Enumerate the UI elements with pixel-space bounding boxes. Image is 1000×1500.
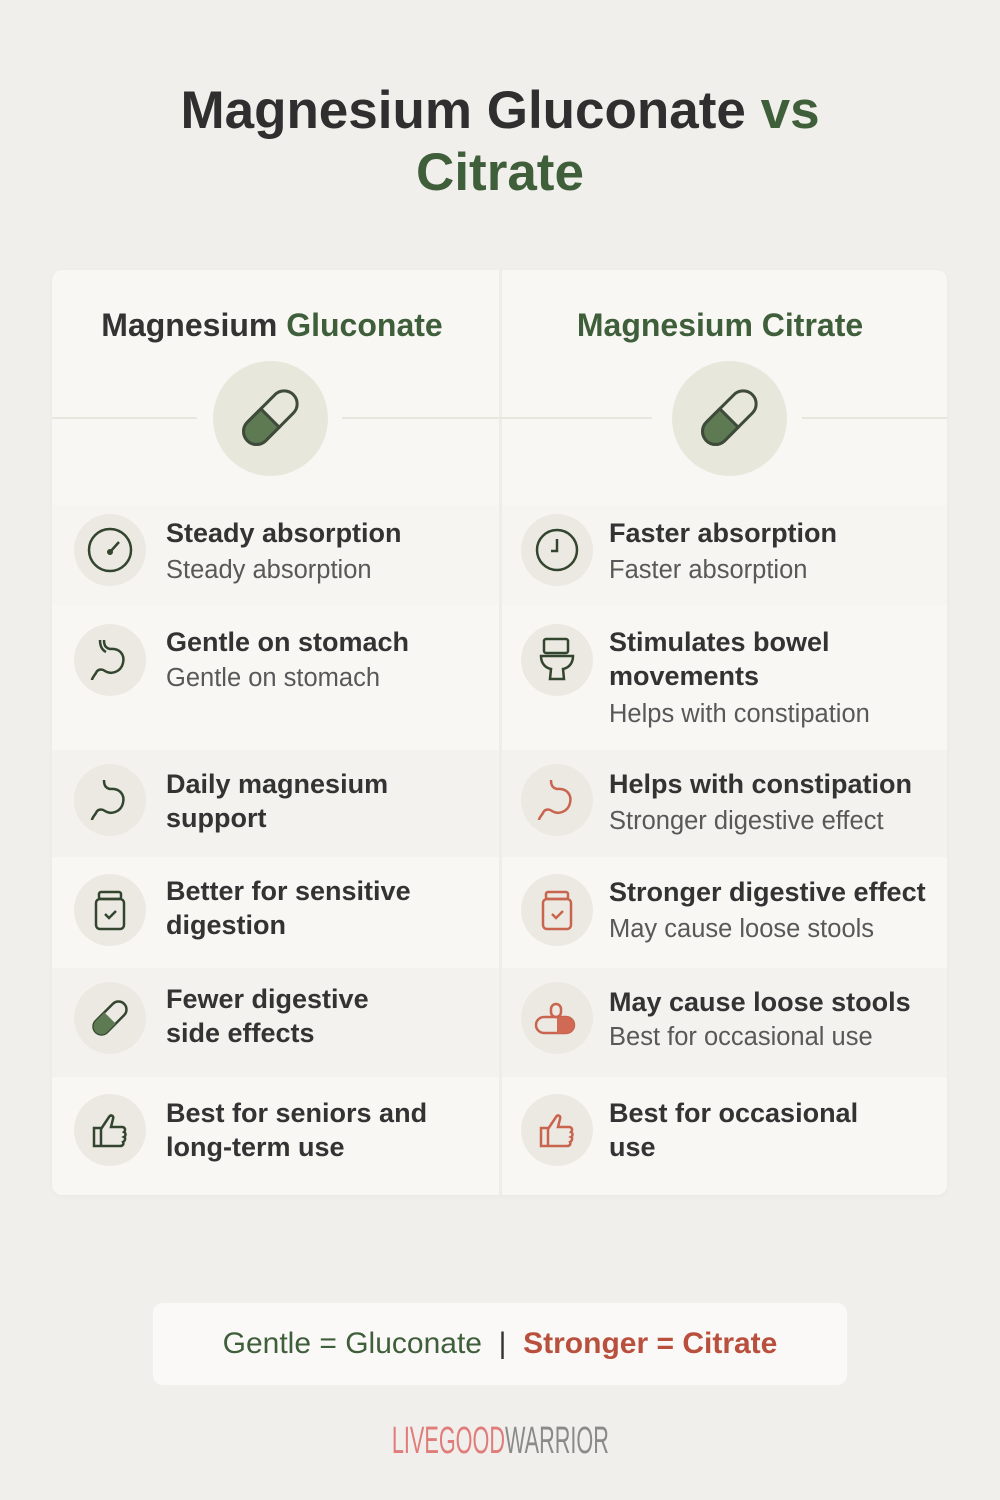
left row 6: Best for seniors and: [166, 1098, 427, 1128]
logo: LIVEGOODWARRIOR: [391, 1420, 609, 1462]
right row 3: [521, 764, 912, 836]
header: citrate: Magnesium Citrate: [577, 307, 863, 343]
right row 2: movements: [609, 661, 759, 691]
right row 5: Best for occasional use: [609, 1023, 873, 1051]
summary box: Gentle = Gluconate | Stronger = Citrate: [223, 1327, 777, 1360]
summary box: [153, 1303, 847, 1385]
icon: capsule red: [521, 982, 593, 1054]
icon: stomach red: [521, 764, 593, 836]
icon: gauge: [74, 514, 146, 586]
icon: clock: [521, 514, 593, 586]
title: Magnesium Gluconate vs: [180, 81, 820, 140]
left row 3: [74, 764, 388, 836]
title: Citrate: [416, 143, 584, 202]
right row 1: [521, 514, 837, 586]
right row 2: Helps with constipation: [609, 700, 870, 728]
left row 2: Gentle on stomach: [166, 627, 409, 657]
left row 2: [74, 624, 409, 696]
icon: jar: [74, 874, 146, 946]
left row 1: Steady absorption: [166, 556, 372, 584]
comparison card: [52, 270, 947, 1195]
left row 5: Fewer digestive: [166, 984, 369, 1014]
right row 1: Faster absorption: [609, 518, 837, 548]
right row 3: Stronger digestive effect: [609, 807, 884, 835]
right row 2: [521, 624, 870, 728]
left row 1: [74, 514, 402, 586]
icon: jar red: [521, 874, 593, 946]
right row 6: Best for occasional: [609, 1098, 858, 1128]
left row 2: Gentle on stomach: [166, 664, 380, 692]
icon: toilet: [521, 624, 593, 696]
left row 4: Better for sensitive: [166, 876, 411, 906]
left row 5: side effects: [166, 1018, 315, 1048]
right row 4: Stronger digestive effect: [609, 877, 926, 907]
right row 4: May cause loose stools: [609, 915, 874, 943]
left row 4: digestion: [166, 910, 286, 940]
right row 6: use: [609, 1132, 656, 1162]
header: gluconate: Magnesium Gluconate: [101, 307, 443, 343]
icon: pill: [74, 982, 146, 1054]
title: [180, 81, 820, 202]
left row 1: Steady absorption: [166, 518, 402, 548]
icon: thumbs up red: [521, 1094, 593, 1166]
right row 5: [521, 982, 911, 1054]
icon: stomach: [74, 764, 146, 836]
left row 6: [74, 1094, 427, 1166]
left row 5: [74, 982, 369, 1054]
icon: pill right: [672, 361, 787, 476]
right row 6: [521, 1094, 858, 1166]
left row 3: Daily magnesium: [166, 769, 388, 799]
icon: pill left: [213, 361, 328, 476]
right row 2: Stimulates bowel: [609, 627, 830, 657]
left row 4: [74, 874, 411, 946]
right row 1: Faster absorption: [609, 556, 807, 584]
right row 5: May cause loose stools: [609, 987, 911, 1017]
icon: stomach: [74, 624, 146, 696]
right row 4: [521, 874, 926, 946]
left row 3: support: [166, 803, 266, 833]
left row 6: long-term use: [166, 1132, 345, 1162]
icon: thumbs up: [74, 1094, 146, 1166]
right row 3: Helps with constipation: [609, 769, 912, 799]
